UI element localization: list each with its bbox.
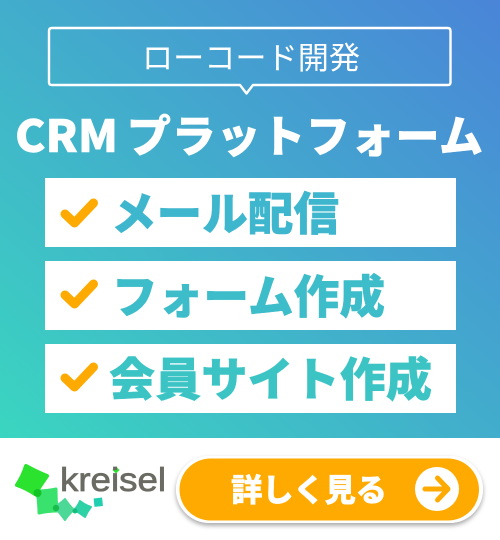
button: see details xyxy=(176,456,483,523)
speech bubble: low-code development: ローコード開発 xyxy=(142,33,360,78)
speech bubble: low-code development xyxy=(49,28,450,94)
title: プラットフォーム xyxy=(127,101,483,165)
button: see details: 詳しく見る xyxy=(231,465,387,511)
feature row: mail delivery: メール配信 xyxy=(111,178,339,244)
logo wordmark: kreisel xyxy=(60,461,166,498)
icon: check mark xyxy=(65,367,94,387)
icon: arrow circle xyxy=(415,467,459,511)
logo: kreisel xyxy=(17,461,166,520)
icon: check mark xyxy=(65,203,94,223)
icon: check mark xyxy=(65,284,94,304)
feature row: mail delivery xyxy=(45,178,456,247)
feature row: form creation xyxy=(45,261,456,330)
feature row: member site creation: 会員サイト作成 xyxy=(109,344,432,410)
title: CRM xyxy=(15,101,118,165)
feature row: form creation: フォーム作成 xyxy=(112,261,385,327)
icon: logo squares xyxy=(17,466,120,520)
